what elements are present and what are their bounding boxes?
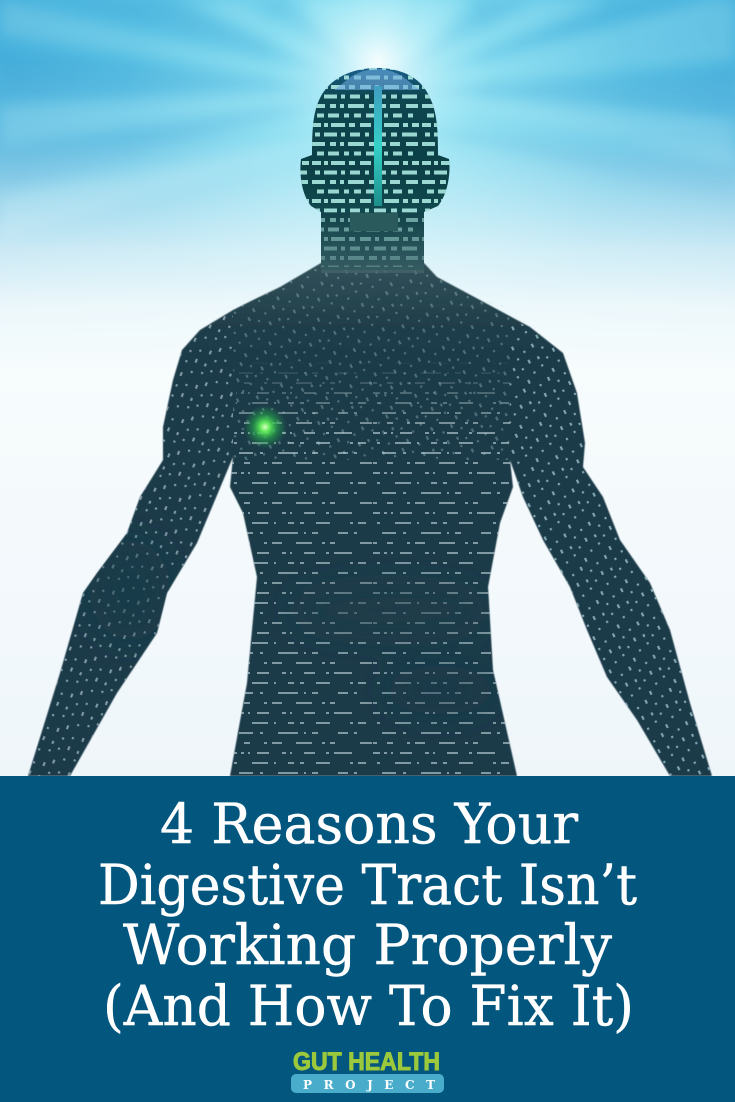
crown highlight (334, 69, 420, 90)
shoulder text speckle (230, 262, 515, 462)
shading over the body (90, 540, 495, 714)
torso text (228, 360, 520, 777)
logo: Gut Health Project: PROJECT (303, 1078, 435, 1092)
title text: Digestive Tract Isn’t (98, 853, 637, 917)
title text: Working Properly (123, 913, 612, 977)
head (298, 66, 452, 216)
right arm text (510, 324, 712, 776)
logo: Gut Health Project: GUT HEALTH (293, 1048, 440, 1076)
sky background with light rays (0, 0, 735, 780)
green glow on chest (243, 405, 287, 449)
title text: (And How To Fix It) (103, 974, 634, 1038)
title text: 4 Reasons Your (160, 792, 579, 856)
title text (98, 792, 637, 1038)
central glowing stripe (374, 86, 382, 206)
human figure made of text (20, 66, 730, 780)
left arm text (28, 315, 233, 776)
logo: Gut Health Project (291, 1048, 444, 1093)
body silhouette (28, 263, 712, 776)
neck (321, 212, 424, 273)
title panel (0, 776, 735, 1102)
